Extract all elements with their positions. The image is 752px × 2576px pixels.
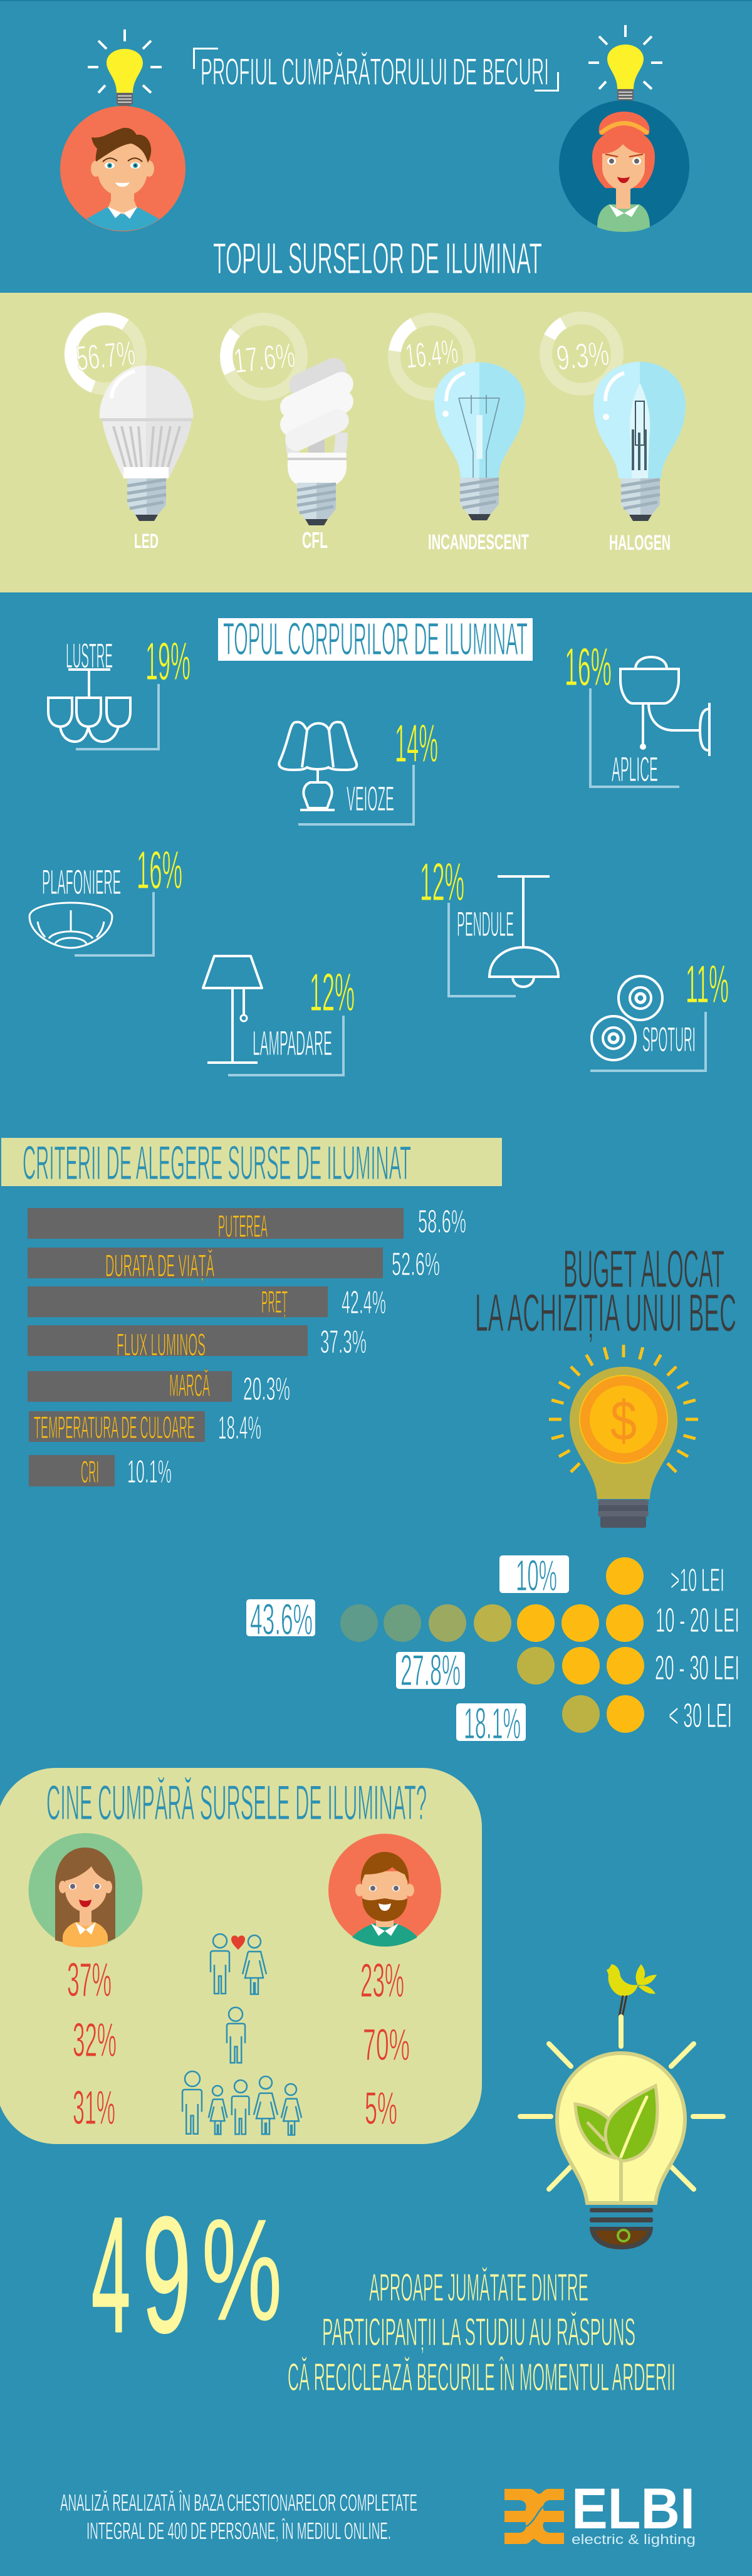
panel: who buys light sources	[0, 1768, 482, 2144]
bar: CRI 10.1%: CRI	[81, 1454, 99, 1490]
text: 19%	[145, 632, 191, 691]
text: 14%	[395, 714, 438, 774]
icon: family	[182, 2071, 301, 2135]
callout: 27.8%	[396, 1646, 465, 1695]
callout: 10%: 10%	[516, 1551, 557, 1600]
bar: luminous flux 37.3%: FLUX LUMINOS	[117, 1327, 206, 1362]
icon: bulb with dollar coin	[549, 1345, 698, 1528]
icon: single person	[227, 2007, 245, 2063]
item: pendant lamps 12%: 12%	[420, 853, 464, 912]
bulb: CFL	[276, 354, 357, 525]
bar: power 58.6%: PUTEREA	[218, 1209, 268, 1244]
stat: 49% recycle: 4	[91, 2183, 130, 2367]
bar: CRI 10.1%	[29, 1454, 172, 1490]
bar: luminous flux 37.3%	[28, 1324, 367, 1362]
bar: lifespan 52.6%	[28, 1246, 440, 1283]
donut: incandescent 16.4%: 16.4%	[404, 332, 460, 376]
bar chart: selection criteria: 18.4%	[218, 1410, 261, 1446]
panel: top light sources	[0, 293, 752, 592]
item: pendant lamps 12%: PENDULE	[457, 904, 514, 944]
dots: row over 30 lei	[562, 1695, 644, 1733]
title: profile of the bulb buyer	[194, 49, 558, 93]
callout: 43.6%	[246, 1595, 315, 1644]
donut: halogen 9.3%	[546, 318, 617, 389]
label: CFL: CFL	[302, 527, 328, 553]
item: wall lamps 16%	[565, 638, 709, 789]
icon: right light bulb	[588, 25, 662, 107]
bar: color temperature 18.4%	[29, 1410, 261, 1446]
icon: bird on ray	[607, 1964, 657, 2017]
text: 16%	[137, 841, 182, 900]
label: LED: LED	[134, 530, 159, 552]
bar: power 58.6%: 58.6%	[418, 1204, 466, 1240]
bulb: incandescent	[434, 362, 525, 520]
callout: 18.1%	[456, 1699, 526, 1748]
item: table lamps 14%	[279, 714, 438, 824]
item: spotlights 11%	[590, 955, 729, 1071]
icon: left light bulb	[88, 29, 162, 110]
avatar: man with orange background	[60, 106, 185, 231]
text: 12%	[310, 963, 355, 1023]
bar: luminous flux 37.3%: 37.3%	[320, 1324, 367, 1360]
bar: color temperature 18.4%: TEMPERATURA DE CULOARE	[34, 1410, 195, 1445]
text: study footnote	[60, 2489, 417, 2545]
item: wall lamps 16%: 16%	[565, 638, 612, 697]
logo: ELBI electric and lighting: ELBI	[572, 2477, 695, 2541]
panel: who buys light sources: 37%	[67, 1953, 112, 2007]
bar: brand 20.3%: MARCĂ	[169, 1368, 210, 1403]
item: table lamps 14%: VEIOZE	[347, 779, 394, 818]
panel: who buys light sources: 32%	[73, 2014, 117, 2067]
bulb: LED	[100, 365, 193, 521]
item: chandeliers 19%	[48, 632, 191, 749]
stat: 49% recycle: 9	[142, 2183, 191, 2367]
icon: bulb with dollar coin: $	[610, 1390, 637, 1453]
logo: ELBI electric and lighting: electric & lighting	[572, 2531, 696, 2547]
label: incandescent: INCANDESCENT	[428, 530, 529, 554]
dots: row 10-20 lei	[340, 1604, 644, 1642]
icon: couple	[211, 1934, 266, 1994]
heading: selection criteria	[1, 1137, 502, 1190]
bar: brand 20.3%: 20.3%	[243, 1371, 290, 1407]
callout: 10%	[499, 1551, 569, 1600]
stat: 49% recycle	[91, 2183, 282, 2367]
dots: row 20-30 lei	[517, 1647, 644, 1685]
donut: LED 56.7%	[70, 318, 140, 389]
text: recycling explanation	[288, 2266, 676, 2399]
donut: CFL 17.6%	[226, 319, 301, 394]
callout: 43.6%: 43.6%	[250, 1595, 313, 1644]
heading: top light fixtures	[218, 614, 533, 665]
dots: row under 10 lei	[606, 1557, 644, 1595]
text: LAMPADARE	[253, 1023, 332, 1063]
bar chart: selection criteria: 42.4%	[342, 1285, 386, 1321]
item: floor lamps 12%	[203, 956, 355, 1075]
logo: ELBI electric and lighting	[504, 2477, 696, 2547]
donut: LED 56.7%: 56.7%	[75, 333, 137, 378]
donut: CFL 17.6%: 17.6%	[232, 335, 297, 381]
stat: 49% recycle: %	[202, 2189, 282, 2350]
item: chandeliers 19%: LUSTRE	[66, 636, 113, 675]
callout: 27.8%: 27.8%	[400, 1646, 461, 1695]
heading: budget allocated	[475, 1239, 736, 1342]
bar: price 42.4%	[28, 1285, 386, 1321]
bar: power 58.6%	[28, 1204, 466, 1244]
bar chart: selection criteria	[28, 1204, 466, 1490]
donut: halogen 9.3%: 9.3%	[555, 334, 611, 377]
bar: brand 20.3%	[28, 1368, 290, 1407]
bar: lifespan 52.6%: DURATA DE VIAȚĂ	[105, 1248, 214, 1283]
bar chart: selection criteria: 10.1%	[127, 1454, 172, 1490]
panel: who buys light sources: 23%	[360, 1954, 404, 2007]
avatar: bearded man with orange background	[328, 1834, 441, 1947]
avatar: woman with dark blue background	[559, 100, 689, 232]
stat: single men 70%: 70%	[363, 2021, 410, 2070]
item: pendant lamps 12%	[420, 853, 558, 996]
text: 18.1%	[464, 1699, 521, 1748]
text: study footnote: INTEGRAL DE 400 DE PERSOANE, ÎN MEDIUL ONLINE.	[86, 2518, 391, 2545]
item: ceiling lights 16%	[29, 841, 182, 955]
item: wall lamps 16%: APLICE	[612, 749, 658, 789]
label: halogen: HALOGEN	[609, 531, 671, 555]
bar: price 42.4%: PREȚ	[261, 1285, 288, 1320]
bar: lifespan 52.6%: 52.6%	[392, 1246, 440, 1283]
avatar: woman with green background	[29, 1833, 143, 1947]
panel: who buys light sources: 31%	[73, 2081, 115, 2135]
item: ceiling lights 16%: PLAFONIERE	[42, 862, 121, 902]
panel: who buys light sources: 5%	[365, 2083, 397, 2134]
donut: incandescent 16.4%	[394, 319, 469, 394]
icon: recycling bulb with leaves	[520, 2017, 723, 2249]
bulb: halogen	[593, 362, 686, 521]
